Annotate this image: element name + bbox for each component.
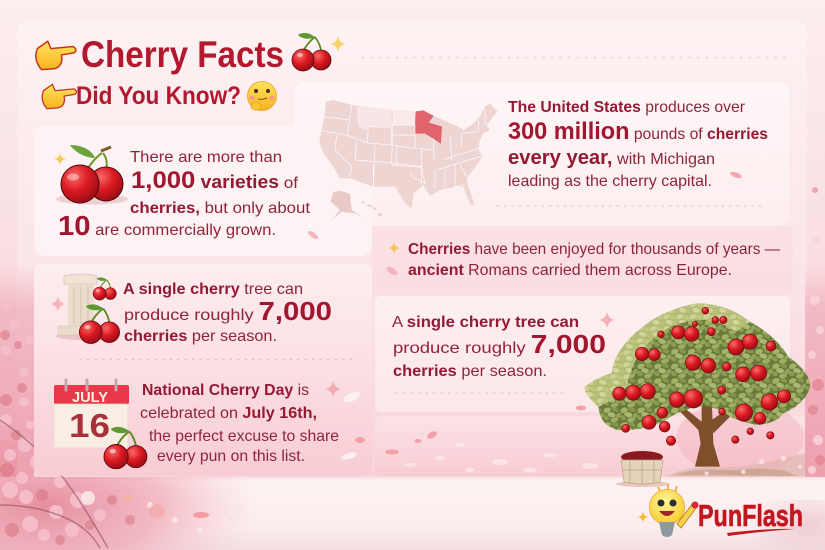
icon: sparkle xyxy=(388,242,400,254)
text: US production: every year, with Michigan xyxy=(508,147,715,169)
text: Romans: ancient Romans carried them across Europe. xyxy=(408,262,732,279)
panel: empty lower card xyxy=(375,401,805,476)
icon: basket of cherries xyxy=(616,451,670,487)
text: cherry tree yield: cherries per season. xyxy=(124,328,277,345)
illustration: cherry tree xyxy=(585,303,810,477)
text: national cherry day: every pun on this list. xyxy=(157,448,305,465)
heading: did you know: Did You Know? xyxy=(76,82,241,110)
text: national cherry day: National Cherry Day is xyxy=(142,382,309,399)
icon: July 16 calendar xyxy=(54,380,147,469)
icon: July 16 calendar: JULY xyxy=(72,390,108,406)
icon: column with cherries xyxy=(50,274,120,344)
panel: history and national day card xyxy=(34,264,372,476)
main panel xyxy=(17,20,807,477)
text: US production xyxy=(508,99,768,190)
cherries on the tree xyxy=(613,307,791,445)
panel: varieties card xyxy=(34,125,372,256)
text: Romans: Cherries have been enjoyed for thousands of years — xyxy=(408,241,780,258)
panel: single tree card xyxy=(375,296,790,412)
text: varieties: 1,000 varieties of xyxy=(131,167,299,194)
blossoms: lower left xyxy=(0,265,228,548)
text: Romans xyxy=(408,241,780,279)
text: varieties xyxy=(58,149,311,241)
text: national cherry day: the perfect excuse to share xyxy=(149,428,339,445)
panel: Romans card xyxy=(372,226,793,295)
logo: PunFlash xyxy=(638,484,803,537)
foliage xyxy=(585,303,810,430)
text: varieties: There are more than xyxy=(130,149,282,166)
decorative dots under title xyxy=(362,56,787,58)
text: tree yield: produce roughly 7,000 xyxy=(393,329,606,359)
text: tree yield xyxy=(392,314,606,380)
text: varieties: 10 are commercially grown. xyxy=(58,210,276,241)
text: cherry tree yield: produce roughly 7,000 xyxy=(124,296,332,326)
panel: map card xyxy=(294,82,789,226)
text: varieties: cherries, but only about xyxy=(130,200,311,217)
icon: July 16 calendar: 16 xyxy=(69,407,110,444)
text: tree yield: cherries per season. xyxy=(393,363,547,380)
title: Cherry Facts xyxy=(81,34,284,75)
text: US production: The United States produces over xyxy=(508,99,746,116)
map of the United States xyxy=(319,100,497,220)
tree trunk xyxy=(680,397,737,467)
text: US production: leading as the cherry capital. xyxy=(508,173,712,190)
text: cherry tree yield xyxy=(123,281,332,345)
text: national cherry day xyxy=(140,382,339,465)
icon: cherries xyxy=(54,145,128,204)
text: national cherry day: celebrated on July 16th, xyxy=(140,405,317,422)
blossoms: right edge xyxy=(805,187,825,477)
text: tree yield: A single cherry tree can xyxy=(392,314,579,331)
undergrowth xyxy=(667,453,805,477)
text: US production: 300 million pounds of cherries xyxy=(508,118,768,145)
text: cherry tree yield: A single cherry tree can xyxy=(123,281,303,298)
